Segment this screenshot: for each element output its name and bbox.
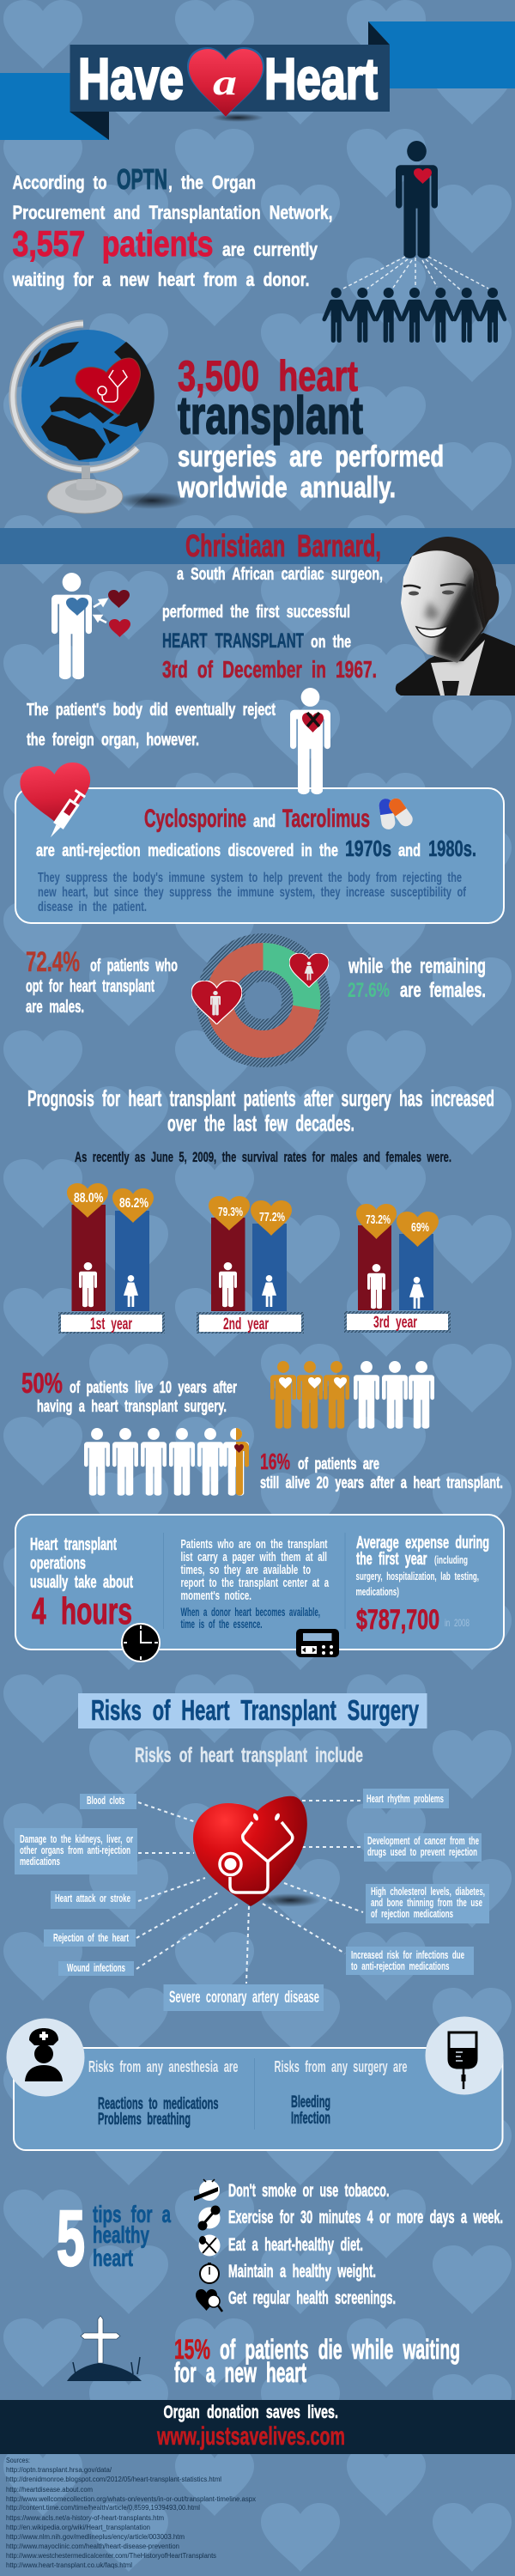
- banner strip: [0, 528, 515, 564]
- risk: coronary disease: Severe coronary artery disease: [169, 1989, 319, 2007]
- tip: no smoking: [194, 2179, 390, 2201]
- text: immune explanation: disease in the patient.: [38, 900, 147, 914]
- panel: operations facts: [15, 1515, 504, 1662]
- sources: Sources:: [6, 2457, 30, 2464]
- text: 15 percent stat: [174, 2334, 460, 2388]
- sources: http://www.nlm.nih.gov/medlineplus/ency/article/003003.htm: [6, 2533, 185, 2541]
- risk: wound infections: Wound infections: [67, 1961, 125, 1974]
- heading: 5 tips: 5: [57, 2195, 85, 2282]
- text: surgery risks: Risks from any surgery are: [275, 2058, 407, 2075]
- text: anesthesia risks: Risks from any anesthesia are: [88, 2058, 239, 2075]
- text: 3,500 surgeries: [177, 352, 444, 504]
- risk: organ damage: [15, 1828, 137, 1874]
- icon group: 3 of 6 people: [270, 1361, 434, 1429]
- risk: heart attack: Heart attack or stroke: [55, 1892, 130, 1905]
- text: OPTN intro: OPTN: [117, 163, 167, 195]
- tip: diet: [199, 2234, 363, 2257]
- icon: clock: [122, 1624, 160, 1662]
- text: rejection note: The patient's body did eventually reject: [27, 701, 276, 720]
- text: average expense: in 2008: [445, 1617, 470, 1629]
- risk: blood clots: [80, 1794, 136, 1809]
- text: pager note: time is of the essence.: [180, 1617, 263, 1631]
- risk: cancer: [364, 1833, 482, 1862]
- text: operation time: 4 hours: [32, 1590, 132, 1632]
- text: 15 percent stat: 15%: [174, 2334, 210, 2365]
- sources: [6, 2457, 256, 2569]
- text: OPTN intro: [12, 163, 332, 290]
- text: 3,500 surgeries: 3,500 heart: [178, 352, 358, 400]
- sources: https://www.acls.net/a-history-of-heart-transplants.htm: [6, 2514, 164, 2522]
- portrait: Christiaan Barnard: [396, 537, 515, 696]
- text: 50 percent stat: [21, 1367, 237, 1416]
- text: average expense: [355, 1534, 489, 1635]
- sources: http://www.wellcomecollection.org/whats-on/events/in-or-out/transplant-timeline.aspx: [6, 2495, 256, 2503]
- text: Barnard biography: [162, 528, 383, 683]
- text: 16 percent stat: of patients are: [298, 1455, 379, 1473]
- icon: IV bag: [426, 2016, 503, 2095]
- text: 16 percent stat: [260, 1449, 503, 1492]
- text: pager note: When a donor heart becomes available,: [180, 1605, 320, 1619]
- tip: no smoking: Don't smoke or use tobacco.: [228, 2181, 390, 2201]
- heading: 5 tips: tips for a: [93, 2201, 171, 2227]
- risk: rejection: Rejection of the heart: [53, 1931, 129, 1944]
- text: anesthesia risks: Reactions to medications: [98, 2095, 218, 2113]
- panel: anti-rejection medications: [15, 688, 504, 923]
- text: drug names: Tacrolimus: [282, 805, 370, 833]
- sources: http://optn.transplant.hrsa.gov/data/: [6, 2466, 112, 2474]
- text: average expense: the first year: [356, 1550, 427, 1569]
- risk: rejection: [44, 1929, 136, 1947]
- text: surgery risks: Bleeding: [291, 2093, 330, 2111]
- text: Barnard biography: on the: [311, 633, 351, 652]
- footer band: Organ donation saves lives.: [163, 2403, 338, 2422]
- text: OPTN intro: According to: [12, 172, 106, 193]
- text: OPTN intro: 3,557 patients: [12, 223, 213, 264]
- text: 50 percent stat: having a heart transplant surgery.: [37, 1398, 227, 1416]
- chart: survival rates year 2: [197, 1196, 304, 1334]
- icon: title heart: [187, 47, 264, 122]
- text: average expense: $787,700: [356, 1604, 439, 1635]
- tip: weight: Maintain a healthy weight.: [228, 2262, 376, 2281]
- risk: heart rhythm: [363, 1789, 449, 1808]
- text: immune explanation: [38, 871, 466, 914]
- text: Barnard biography: 3rd of December in 1967.: [162, 656, 377, 683]
- text: Barnard biography: a South African cardiac surgeon,: [177, 565, 383, 584]
- sources: http://en.wikipedia.org/wiki/Heart_transplantation: [6, 2524, 150, 2531]
- icon: transplant figure: [52, 573, 130, 679]
- chart: survival rates year 2: 2nd year: [223, 1315, 269, 1334]
- text: operation time: operations: [30, 1554, 86, 1573]
- chart: survival rates year 1: 88.0%: [74, 1191, 103, 1206]
- text: operation time: usually take about: [30, 1573, 133, 1592]
- risk: organ damage: medications: [20, 1855, 60, 1868]
- title banner: [0, 21, 515, 140]
- text: discovery decades: [36, 835, 476, 861]
- icon: rejected heart figure: [290, 688, 330, 794]
- title word: Heart: Heart: [264, 46, 378, 112]
- text: male share: 72.4%: [26, 946, 80, 977]
- tip: screenings: Get regular health screenings.: [228, 2288, 396, 2308]
- text: discovery decades: are anti-rejection medications discovered in the: [36, 841, 338, 860]
- risk: cholesterol: [366, 1884, 489, 1923]
- chart: donut male vs female: [191, 933, 330, 1067]
- text: Barnard biography: performed the first successful: [162, 603, 350, 622]
- chart: survival rates year 3: 69%: [411, 1220, 429, 1235]
- icon group: 1 in 6 people: [84, 1428, 249, 1496]
- text: male share: [26, 946, 178, 1017]
- text: operation time: Heart transplant: [30, 1535, 117, 1554]
- text: pager note: list carry a pager with them at all: [180, 1550, 327, 1564]
- text: pager note: [180, 1537, 329, 1631]
- heading: 5 tips: heart: [93, 2245, 133, 2271]
- text: pager note: report to the transplant center at a: [180, 1576, 329, 1590]
- text: discovery decades: 1970s: [345, 835, 391, 861]
- sources: http://www.westchestermedicalcenter.com/TheHistoryofHeartTransplants: [6, 2552, 216, 2560]
- heading: prognosis: over the last few decades.: [167, 1110, 354, 1136]
- sources: http://drenidmonroe.blogspot.com/2012/05/heart-transplant-statistics.html: [6, 2476, 221, 2483]
- dashed connectors: [136, 1801, 363, 1984]
- heading: 5 tips: healthy: [93, 2221, 149, 2248]
- text: 15 percent stat: for a new heart: [174, 2357, 306, 2388]
- sources: http://www.heart-transplant.co.uk/faqs.html: [6, 2561, 132, 2569]
- risk: wound infections: [58, 1961, 134, 1976]
- icon: globe with heart: [13, 324, 188, 513]
- chart: survival rates year 3: 3rd year: [373, 1314, 417, 1332]
- text: pager note: moment's notice.: [180, 1589, 251, 1603]
- text: pager note: Patients who are on the transplant: [180, 1537, 328, 1552]
- text: surgery risks: [275, 2058, 407, 2128]
- icon: pager: [296, 1629, 339, 1657]
- icon: title heart: a: [213, 64, 237, 103]
- chart: survival rates year 1: [58, 1183, 165, 1334]
- text: 3,500 surgeries: worldwide annually.: [177, 471, 396, 504]
- text: surgery risks: Infection: [291, 2110, 330, 2128]
- risk: coronary disease: [163, 1984, 324, 2011]
- text: Barnard biography: HEART TRANSPLANT: [162, 629, 304, 653]
- text: Barnard biography: Christiaan Barnard,: [185, 528, 381, 563]
- sources: http://www.mayoclinic.com/health/heart-disease-prevention: [6, 2543, 179, 2550]
- text: 3,500 surgeries: transplant: [178, 386, 363, 446]
- chart: survival rates year 1: 1st year: [90, 1315, 132, 1334]
- text: female share: [348, 955, 486, 1002]
- text: 50 percent stat: 50%: [21, 1367, 63, 1399]
- heading: prognosis: [27, 1085, 494, 1136]
- risk: organ damage: Damage to the kidneys, liver, or: [20, 1832, 133, 1845]
- panel: anesthesia and surgery risks: [7, 2016, 503, 2150]
- icon: heart with stethoscope: [193, 1796, 321, 1907]
- heading: 5 tips: [57, 2195, 171, 2282]
- subheading: risks include: Risks of heart transplant include: [135, 1744, 363, 1767]
- chart: survival rates year 2: 79.3%: [218, 1205, 243, 1219]
- text: female share: 27.6%: [348, 979, 390, 1002]
- chart: survival rates year 3: [344, 1204, 451, 1333]
- title word: Have: Have: [78, 46, 184, 112]
- risk: blood clots: Blood clots: [87, 1794, 125, 1807]
- icon: nurse: [7, 2018, 84, 2097]
- text: OPTN intro: , the Organ: [168, 172, 256, 193]
- chart: survival rates year 2: 77.2%: [259, 1210, 285, 1224]
- text: drug names: Cyclosporine: [144, 805, 246, 833]
- risk: heart attack: [51, 1891, 136, 1909]
- text: rejection note: the foreign organ, however.: [27, 731, 199, 750]
- icon: male heart: [191, 981, 242, 1024]
- text: anesthesia risks: Problems breathing: [98, 2111, 191, 2129]
- text: male share: are males.: [26, 998, 84, 1017]
- chart: survival rates year 3: 73.2%: [366, 1212, 391, 1227]
- text: OPTN intro: waiting for a new heart from a donor.: [12, 269, 309, 290]
- risk: cholesterol: of rejection medications: [371, 1907, 453, 1920]
- icon: grave: [67, 2316, 142, 2381]
- text: 50 percent stat: of patients live 10 years after: [70, 1379, 237, 1397]
- text: discovery decades: and: [398, 841, 421, 860]
- text: average expense: medications): [355, 1585, 399, 1598]
- text: operation time: [30, 1535, 133, 1632]
- text: anesthesia risks: [88, 2058, 239, 2129]
- icon: female heart: [289, 953, 329, 987]
- text: average expense: (including: [434, 1553, 468, 1566]
- tip: weight: [200, 2262, 376, 2283]
- text: male share: opt for heart transplant: [26, 977, 154, 996]
- icon: donor and waiting patients: [323, 141, 506, 343]
- text: discovery decades: 1980s.: [428, 835, 476, 861]
- text: male share: of patients who: [90, 957, 178, 975]
- text: OPTN intro: are currently: [222, 239, 318, 260]
- icon: heart and syringe: [18, 761, 95, 841]
- chart: survival rates year 1: 86.2%: [119, 1196, 148, 1211]
- tip: screenings: [196, 2288, 396, 2312]
- footer band: www.justsavelives.com: [156, 2422, 345, 2451]
- footer band: [0, 2400, 515, 2454]
- sources: http://heartdisease.about.com: [6, 2486, 93, 2494]
- risk: infections: to anti-rejection medications: [351, 1959, 450, 1972]
- sources: http://content.time.com/time/health/article/0,8599,1939493,00.html: [6, 2504, 200, 2512]
- icon: pills: [379, 796, 415, 830]
- tip: exercise: [197, 2205, 503, 2231]
- risk: heart rhythm: Heart rhythm problems: [367, 1792, 444, 1805]
- risk: infections: [346, 1947, 474, 1975]
- text: drug names: and: [253, 812, 276, 831]
- text: rejection note: [27, 701, 276, 750]
- text: pager note: times, so they are available to: [180, 1563, 311, 1577]
- risk: organ damage: other organs from anti-rejection: [20, 1844, 130, 1856]
- tip: diet: Eat a heart-healthy diet.: [228, 2235, 363, 2255]
- text: OPTN intro: Procurement and Transplantation Network,: [12, 202, 333, 223]
- text: 16 percent stat: 16%: [260, 1449, 290, 1474]
